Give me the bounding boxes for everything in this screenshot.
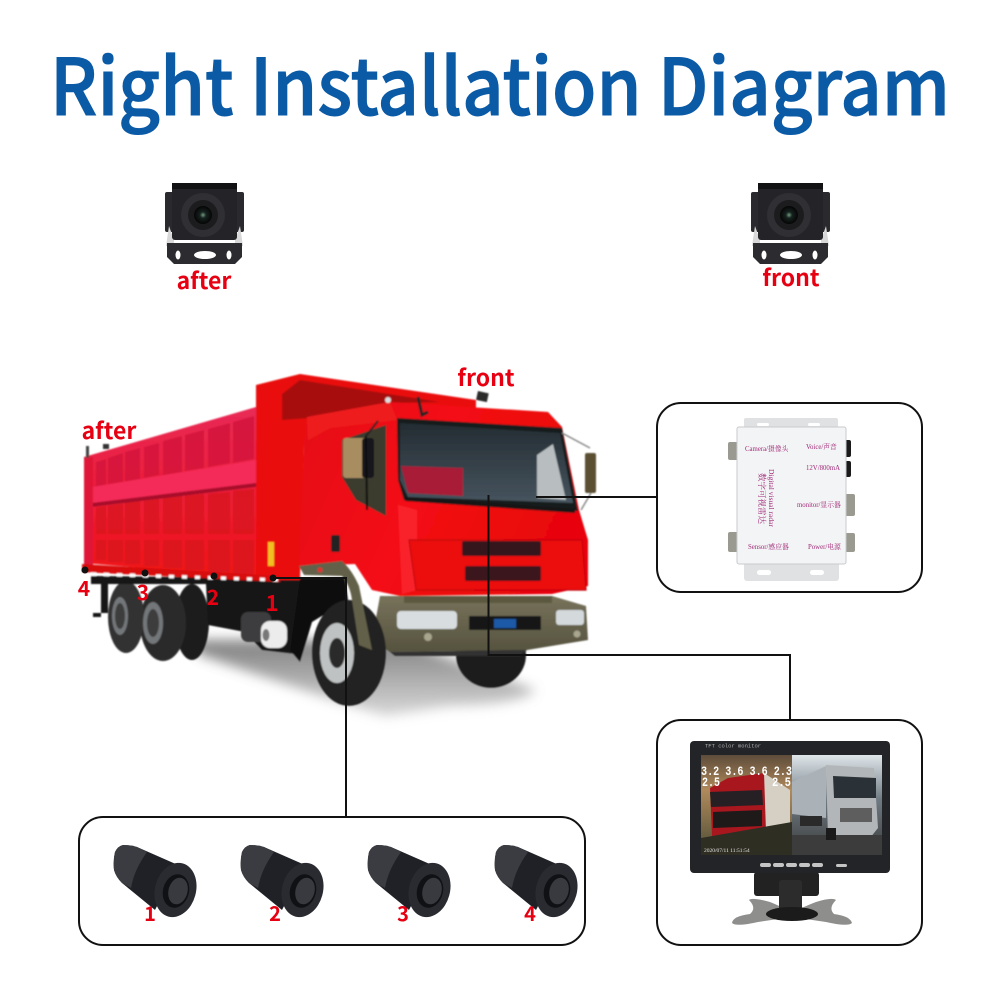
radar printed labels: monitor/显示器 — [797, 500, 841, 509]
connector line: radar box to cab — [536, 496, 657, 498]
sensor 1: 1 — [144, 898, 156, 927]
truck label: front: front — [457, 359, 515, 393]
monitor frame — [690, 741, 890, 873]
side window — [342, 425, 386, 516]
sensor 4: 4 — [524, 898, 536, 927]
illustration: red dump truck — [82, 374, 596, 716]
truck label: after: after — [82, 412, 137, 446]
grille slots — [462, 541, 541, 556]
dump bed side — [82, 407, 280, 582]
left mirror — [343, 438, 369, 478]
monitor left view: 2020/07/11 11:51:54 — [704, 848, 750, 854]
tire pressure readings — [701, 764, 792, 790]
sensor 1 — [114, 845, 202, 927]
monitor left view — [701, 755, 792, 855]
rear camera product with label: after — [177, 262, 232, 296]
radar printed labels: 数字可视雷达 — [757, 473, 767, 525]
tire pressure readings: 3.2 3.6 3.6 2.3 — [701, 764, 792, 779]
sensor 3: 3 — [397, 898, 409, 927]
dump bed front wall — [256, 374, 476, 580]
sensor position markers on truck — [78, 566, 278, 618]
sensor position markers on truck: 1 — [266, 586, 278, 618]
fender and front wheel — [290, 561, 386, 706]
bumper — [372, 596, 588, 656]
sensor 2: 2 — [269, 898, 281, 927]
rear camera product with label — [165, 183, 244, 296]
front camera product with label: front — [762, 259, 820, 293]
radar printed labels: 12V/800mA — [806, 465, 840, 472]
fuel tank — [241, 612, 287, 648]
sensor position markers on truck: 3 — [137, 577, 149, 607]
cab — [299, 391, 596, 596]
sensor position markers on truck: 2 — [207, 582, 219, 612]
radar printed labels: Voice/声音 — [806, 442, 837, 451]
windshield — [397, 418, 578, 511]
roof camera — [476, 391, 489, 402]
radar printed labels: Power/电源 — [808, 542, 841, 551]
monitor buttons — [760, 863, 847, 867]
radar printed labels — [745, 442, 841, 551]
connector line: sensors to chassis — [273, 578, 346, 817]
sensor 2 — [241, 845, 329, 927]
front wheel right — [456, 622, 526, 688]
chassis and engine bay — [91, 576, 312, 654]
tire pressure readings: 2.5 — [772, 775, 791, 790]
monitor brand text: TFT color monitor — [705, 742, 761, 750]
ground shadow — [190, 640, 536, 716]
sensor position markers on truck: 4 — [78, 573, 90, 603]
tire pressure readings: 2.5 — [702, 775, 720, 790]
monitor stand — [732, 872, 852, 925]
radar printed labels: Digital visual radar — [767, 469, 774, 528]
sensor 3 — [368, 845, 456, 927]
panel: radar box — [657, 403, 922, 592]
monitor right view — [792, 755, 882, 855]
radar mounting flanges — [744, 418, 839, 581]
panel: monitor — [657, 720, 922, 945]
panel: parking sensors — [79, 817, 585, 945]
rear wheels — [108, 581, 209, 661]
right mirror — [562, 433, 591, 510]
radar connectors — [728, 440, 855, 552]
front camera product with label — [751, 183, 830, 293]
sensor 4 — [495, 845, 583, 927]
radar printed labels: Sensor/感应器 — [748, 542, 789, 551]
radar body — [737, 427, 846, 564]
title: Right Installation Diagram — [50, 26, 950, 138]
radar printed labels: Camera/摄像头 — [745, 444, 789, 453]
connector line: windshield to monitor — [488, 495, 790, 720]
door handle — [331, 535, 340, 552]
